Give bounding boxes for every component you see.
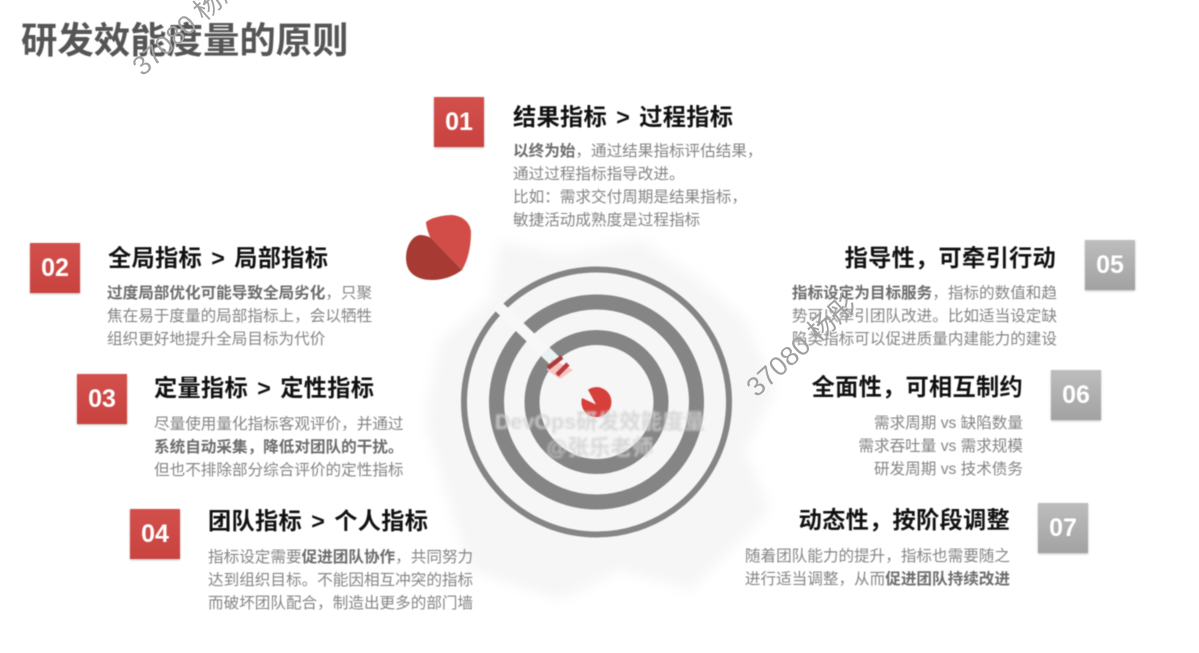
badge 04: 04: [141, 520, 169, 548]
heading 07: 动态性，按阶段调整: [799, 507, 1010, 533]
item 04: [128, 508, 473, 612]
body 01: 比如：需求交付周期是结果指标，: [513, 189, 747, 206]
body 01: 敏捷活动成熟度是过程指标: [513, 212, 700, 229]
body 07: 随着团队能力的提升，指标也需要随之: [745, 548, 1010, 565]
body 05: 指标设定为目标服务，指标的数值和趋: [792, 285, 1057, 302]
bullseye: [581, 387, 611, 417]
body 04: 而破坏团队配合，制造出更多的部门墙: [208, 595, 473, 612]
body 03: [154, 415, 404, 479]
body 03: 系统自动采集，降低对团队的干扰。: [154, 439, 404, 456]
body 01: 以终为始，通过结果指标评估结果，: [513, 143, 763, 160]
body 06: 需求吞吐量 vs 需求规模: [858, 438, 1023, 455]
body 06: 需求周期 vs 缺陷数量: [874, 415, 1023, 432]
inner ring: [532, 338, 661, 466]
item 01: [432, 96, 763, 229]
badge 02: [30, 243, 80, 293]
body 02: 焦在易于度量的局部指标上，会以牺牲: [107, 308, 372, 325]
heading 06: 全面性，可相互制约: [812, 374, 1023, 400]
body 06: 研发周期 vs 技术债务: [874, 461, 1023, 478]
badge 03: [77, 374, 127, 424]
body 01: 通过过程指标指导改进。: [513, 166, 685, 183]
item 07: [745, 502, 1090, 588]
body 02: 过度局部优化可能导致全局劣化，只聚: [107, 285, 372, 302]
body 02: 组织更好地提升全局目标为代价: [107, 331, 325, 348]
badge 05: 05: [1096, 251, 1124, 279]
badge 05: [1085, 240, 1135, 290]
badge 01: [434, 97, 484, 147]
badge 07: [1038, 503, 1088, 553]
item 05: [792, 240, 1136, 348]
center watermark: [495, 409, 705, 460]
item 06: [812, 370, 1102, 478]
badge 02: 02: [41, 254, 69, 282]
body 02: [106, 284, 372, 348]
body 07: 进行适当调整，从而促进团队持续改进: [745, 571, 1010, 588]
badge 07: 07: [1049, 514, 1077, 542]
heading 01: 结果指标 > 过程指标: [513, 104, 733, 130]
badge 03: 03: [88, 385, 116, 413]
heading 03: 定量指标 > 定性指标: [154, 375, 374, 401]
title: 研发效能度量的原则: [21, 20, 349, 61]
arrow shaft marks: [547, 357, 573, 379]
badge 06: 06: [1062, 381, 1090, 409]
body 05: [792, 284, 1057, 348]
badge 01: 01: [445, 108, 473, 136]
badge 06: [1051, 370, 1101, 420]
item 03: [76, 373, 404, 479]
heading 05: 指导性，可牵引行动: [845, 245, 1056, 271]
body 01: [513, 142, 763, 229]
ring gaps: [497, 305, 545, 352]
body 04: 达到组织目标。不能因相互冲突的指标: [208, 572, 473, 589]
body 05: 陷类指标可以促进质量内建能力的建设: [792, 331, 1057, 348]
outer ring: [464, 270, 729, 534]
badge 04: [130, 509, 180, 559]
body 05: 势可以牵引团队改进。比如适当设定缺: [792, 308, 1057, 325]
item 02: [28, 242, 372, 348]
watermark right: 37080 杨彤: [741, 289, 862, 403]
center watermark: DevOps研发效能度量: [495, 410, 705, 434]
body 04: 指标设定需要促进团队协作，共同努力: [208, 549, 473, 566]
body 03: 尽量使用量化指标客观评价，并通过: [154, 416, 404, 433]
arrow fletching: red petal: [405, 214, 472, 281]
center watermark: @张乐老师: [547, 436, 653, 460]
body 07: [745, 547, 1010, 588]
heading 02: 全局指标 > 局部指标: [108, 245, 328, 271]
body 06: [858, 414, 1023, 478]
body 04: [208, 548, 473, 612]
heading 04: 团队指标 > 个人指标: [208, 508, 428, 534]
middle ring: [496, 302, 696, 502]
body 03: 但也不排除部分综合评价的定性指标: [154, 462, 404, 479]
